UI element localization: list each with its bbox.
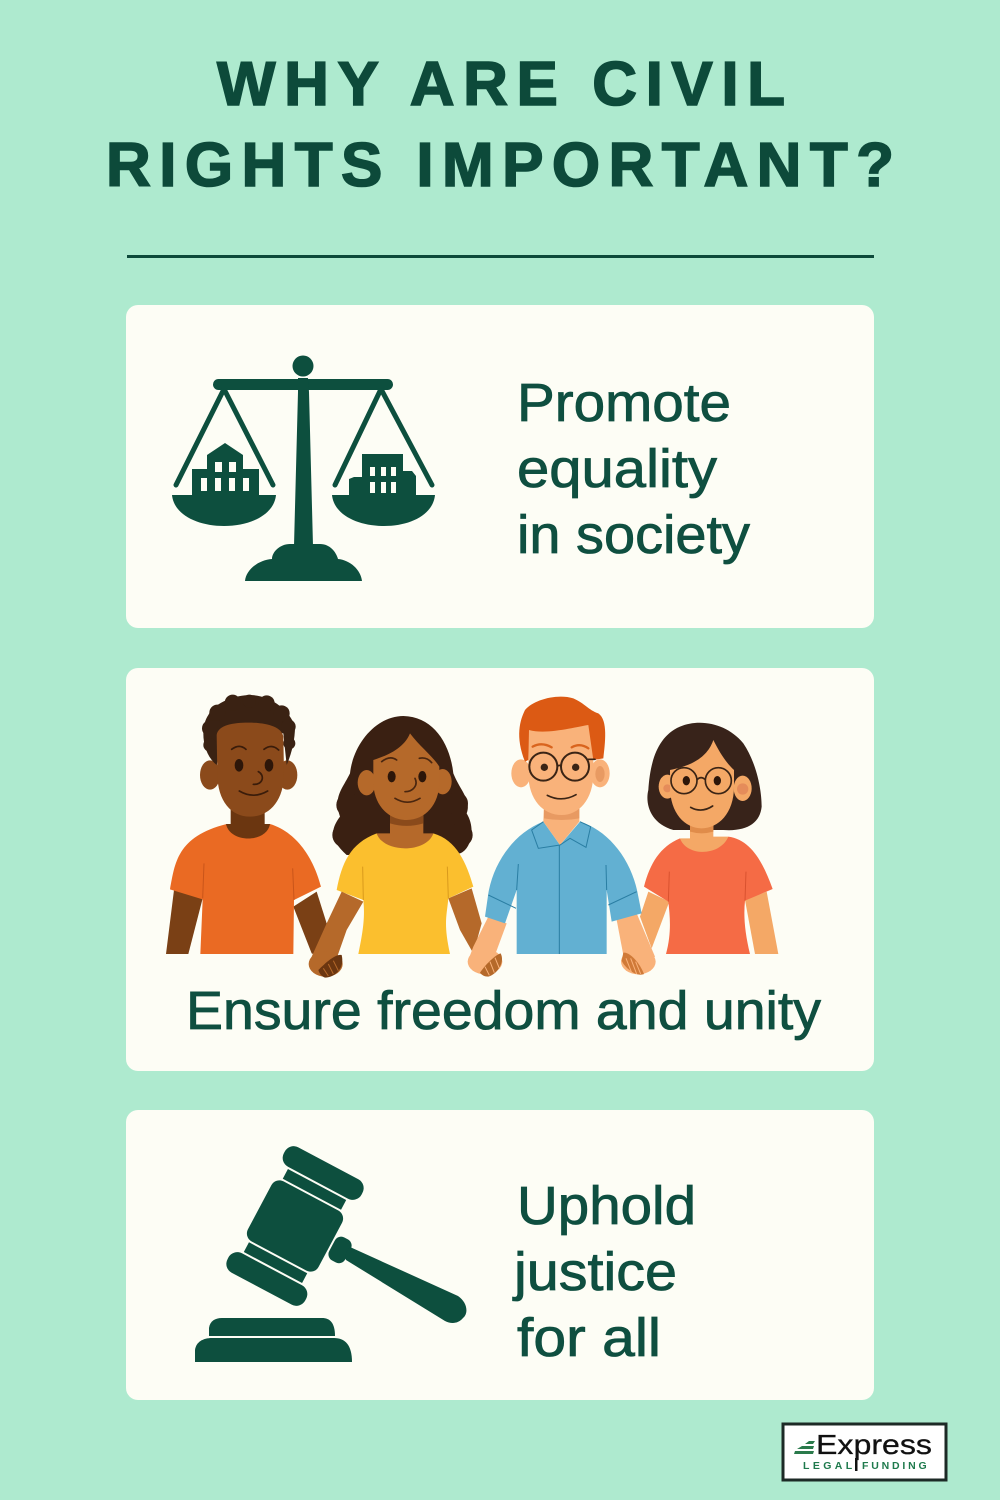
text: uphold justice for all: Uphold bbox=[517, 1176, 696, 1236]
text: uphold justice for all: for all bbox=[517, 1308, 661, 1368]
person: man in orange shirt bbox=[166, 695, 327, 957]
person: man in blue shirt bbox=[468, 697, 656, 977]
text: promote equality in society: equality bbox=[517, 439, 717, 499]
title: RIGHTS IMPORTANT? bbox=[106, 131, 894, 200]
panel: uphold justice bbox=[126, 1110, 874, 1400]
icon: gavel bbox=[195, 1143, 466, 1362]
text: uphold justice for all: justice bbox=[512, 1242, 677, 1302]
title bbox=[106, 50, 894, 200]
illustration: four people holding hands bbox=[166, 695, 778, 978]
text: ensure freedom and unity: Ensure freedom and unity bbox=[186, 981, 821, 1041]
logo: express legal funding: FUNDING bbox=[862, 1460, 929, 1472]
logo: express legal funding: LEGAL bbox=[803, 1460, 856, 1472]
text: uphold justice for all bbox=[512, 1176, 696, 1368]
person: woman in yellow shirt bbox=[309, 716, 482, 978]
text: promote equality in society: Promote bbox=[517, 373, 731, 433]
icon: balance scale with buildings bbox=[172, 356, 435, 581]
person: woman in red shirt bbox=[640, 723, 778, 954]
panel: promote equality bbox=[126, 305, 874, 628]
text: promote equality in society: in society bbox=[517, 505, 750, 565]
logo: express legal funding: Express bbox=[816, 1429, 932, 1460]
text: promote equality in society bbox=[517, 373, 750, 565]
title: WHY ARE CIVIL bbox=[217, 50, 785, 119]
logo: express legal funding bbox=[783, 1424, 946, 1480]
panel: ensure freedom and unity bbox=[126, 668, 874, 1071]
